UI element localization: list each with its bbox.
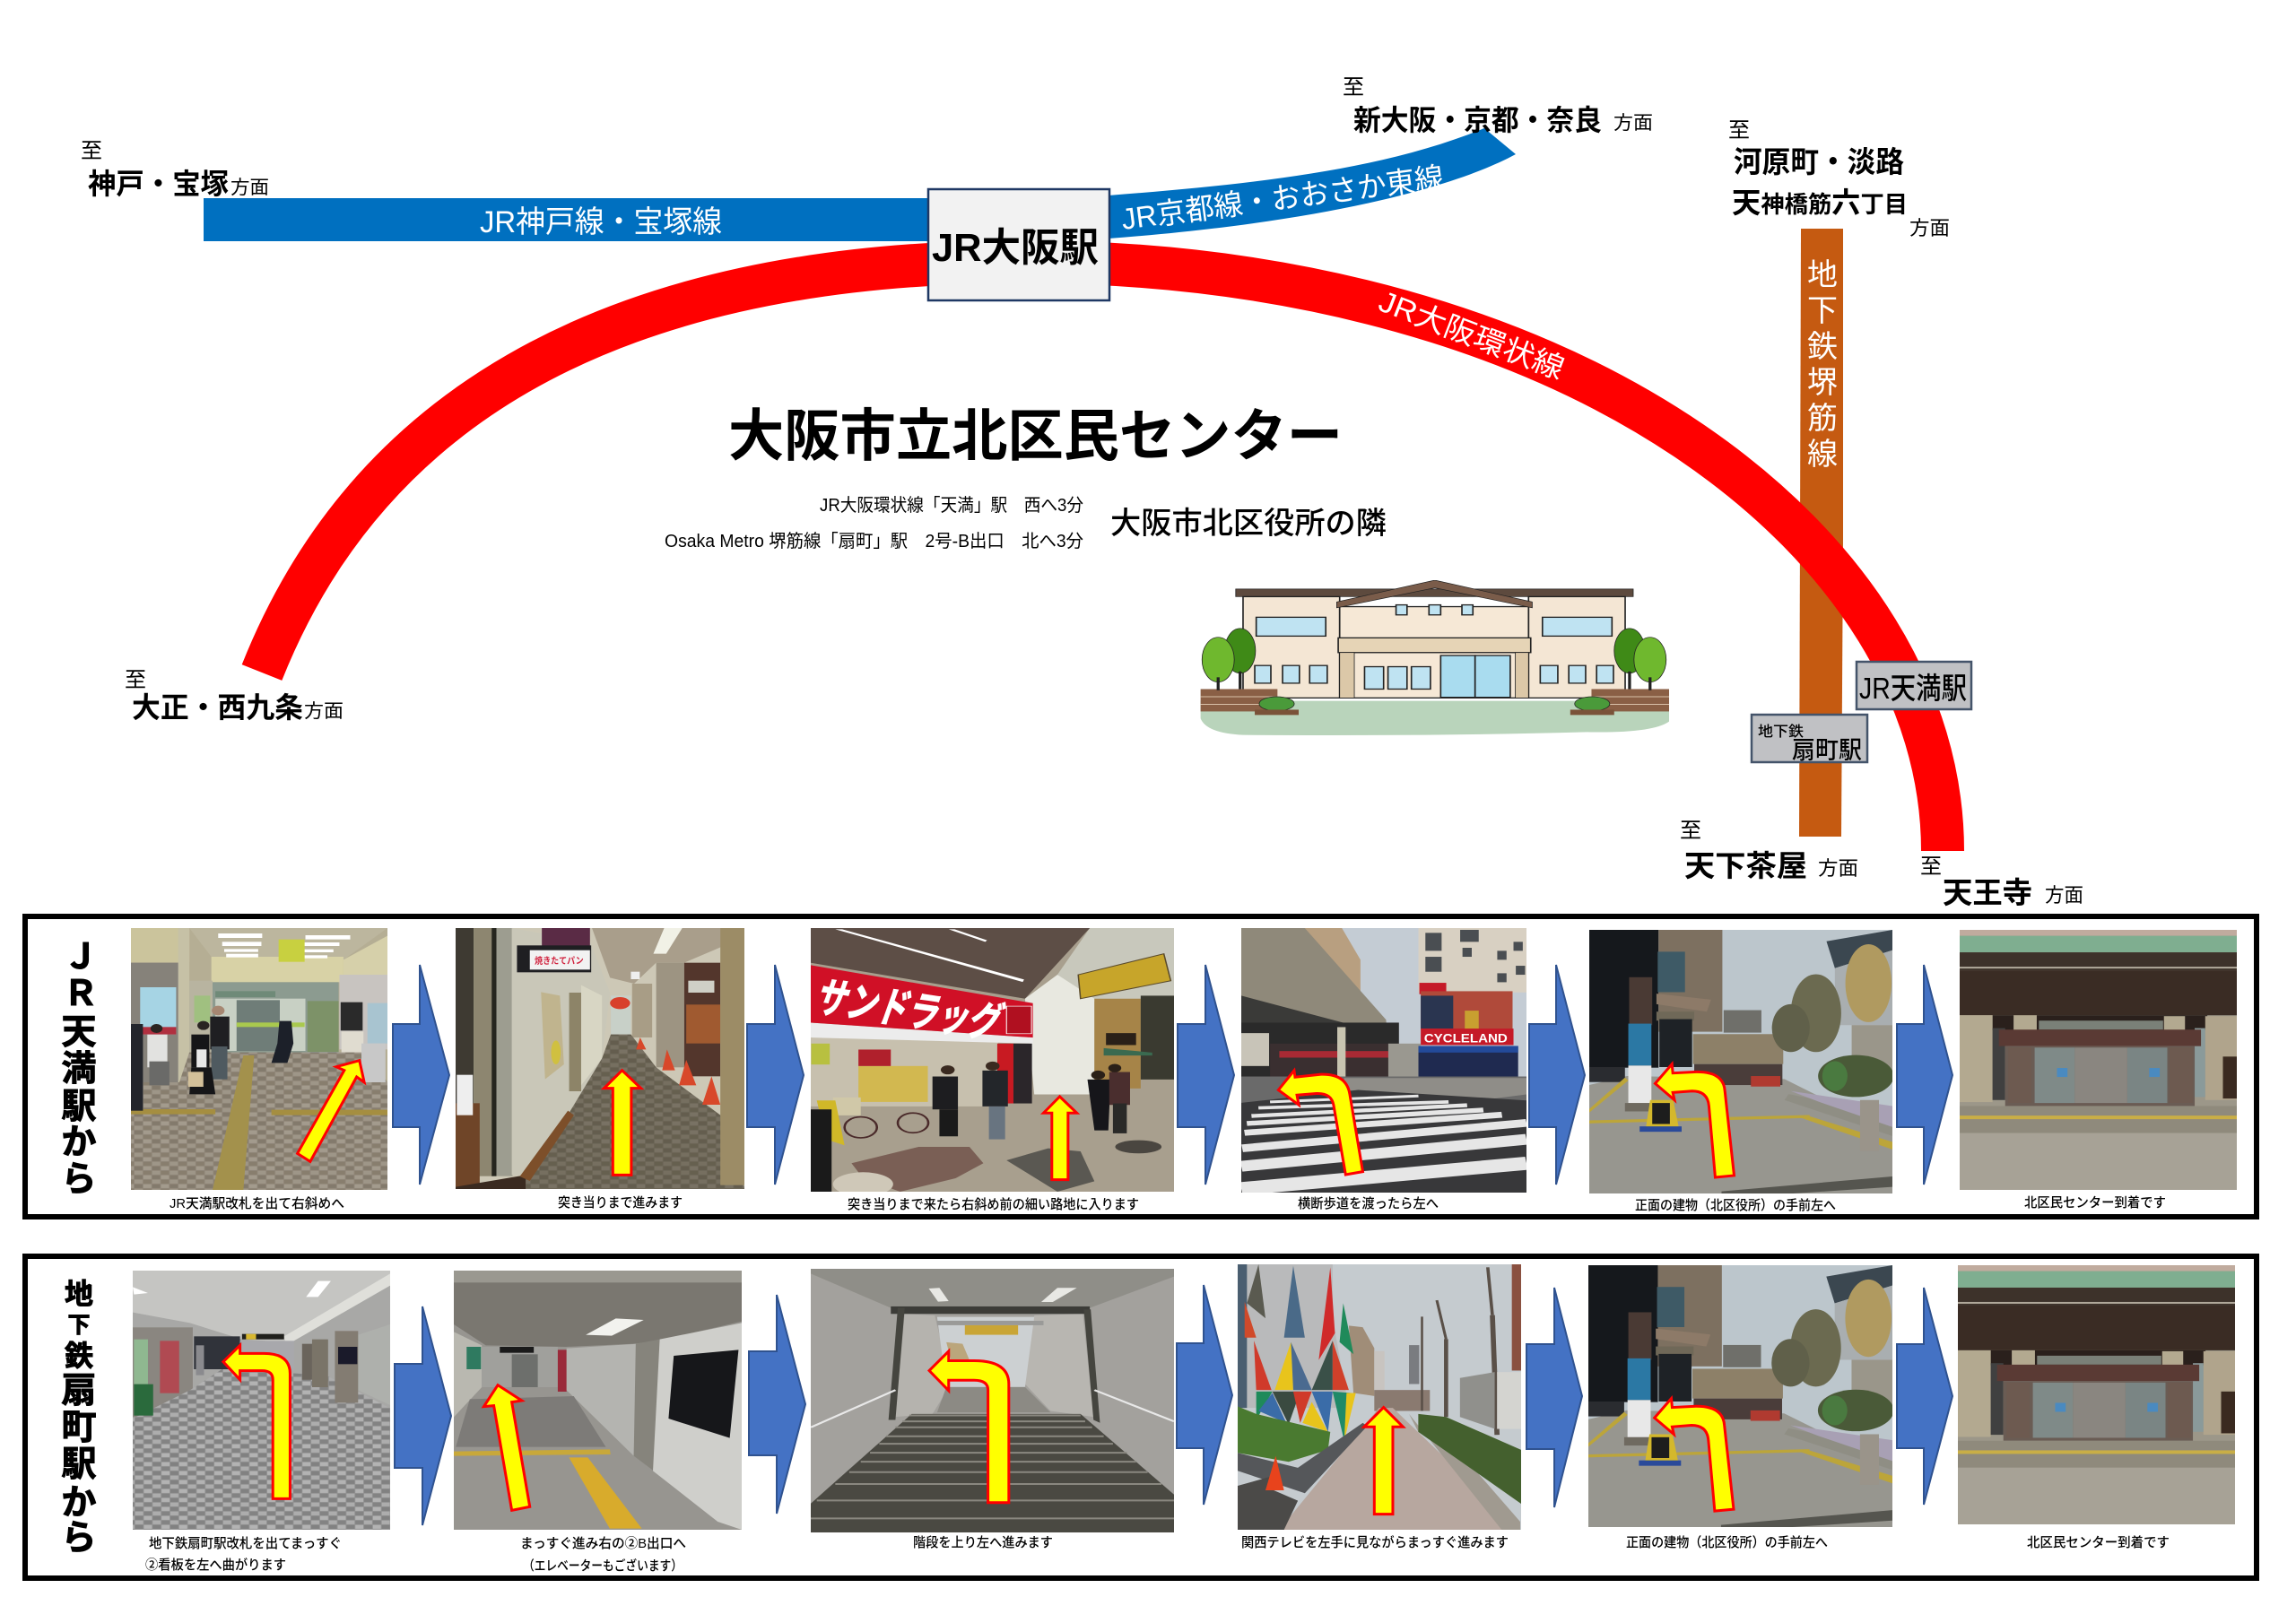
flow arrow 4 xyxy=(1526,1288,1582,1507)
direction: Tengachaya: 至 xyxy=(1680,819,1701,843)
station: JR Osaka: JR大阪駅 xyxy=(932,226,1099,270)
caption 2 xyxy=(520,1536,686,1574)
line: JR Kyoto / Osaka Higashi xyxy=(1109,128,1516,239)
direction: Tengachaya: 方面 xyxy=(1818,857,1858,880)
direction: Taisho Nishikujo: 方面 xyxy=(304,701,344,722)
caption 4: 横断歩道を渡ったら左へ xyxy=(1298,1196,1439,1211)
caption 1: 地下鉄扇町駅改札を出てまっすぐ xyxy=(149,1536,342,1551)
direction: Shin-Osaka Kyoto Nara xyxy=(1343,75,1653,136)
photo 5: ward office front xyxy=(1588,1265,1892,1527)
line: subway Sakaisuji: 筋 xyxy=(1807,402,1838,436)
panel heading: subway Ogimachi: 駅 xyxy=(61,1445,97,1484)
route map xyxy=(204,128,1971,851)
direction: Tennoji: 至 xyxy=(1920,855,1942,879)
line: JR Kobe / Takarazuka xyxy=(204,198,930,241)
panel heading: subway Ogimachi: 扇 xyxy=(61,1372,97,1410)
caption 6: 北区民センター到着です xyxy=(2024,1195,2166,1211)
sign: bakery: 焼きたてパン xyxy=(535,956,584,967)
panel heading: subway Ogimachi xyxy=(61,1278,97,1558)
direction: Shin-Osaka Kyoto Nara: 至 xyxy=(1343,75,1364,100)
caption 1: ②看板を左へ曲がります xyxy=(145,1557,286,1573)
panel heading: JR Temma: 駅 xyxy=(61,1088,97,1126)
arrow: turn left xyxy=(1655,1064,1735,1177)
direction: Tennoji xyxy=(1920,855,2083,909)
panel heading: JR Temma: 天 xyxy=(61,1013,97,1052)
panel heading: JR Temma xyxy=(61,938,99,1199)
line: JR Osaka Loop: JR大阪環状線 xyxy=(1374,284,1569,386)
station: JR Osaka xyxy=(928,189,1109,300)
direction: Shin-Osaka Kyoto Nara: 方面 xyxy=(1613,113,1653,134)
panel heading: subway Ogimachi: 下 xyxy=(67,1313,91,1338)
line: JR Kobe / Takarazuka: JR神戸線・宝塚線 xyxy=(480,205,722,239)
flow arrow 5 xyxy=(1897,965,1952,1185)
line: subway Sakaisuji xyxy=(1799,229,1843,837)
next to ward office: 大阪市北区役所の隣 xyxy=(1110,507,1387,541)
photo 3: shopping arcade with drugstore xyxy=(810,928,1174,1192)
panel heading: JR Temma: ら xyxy=(61,1160,97,1199)
direction: Tengachaya: 天下茶屋 xyxy=(1684,849,1807,882)
station: subway Ogimachi: 地下鉄 xyxy=(1758,724,1804,740)
flow arrow 5 xyxy=(1897,1288,1952,1505)
arrow: turn left xyxy=(1655,1399,1734,1511)
direction: Kawaramachi Awaji Tenjinbashisuji xyxy=(1728,118,1950,239)
caption 4: 関西テレビを左手に見ながらまっすぐ進みます xyxy=(1241,1534,1509,1550)
arrow: straight xyxy=(1044,1097,1077,1180)
panel heading: subway Ogimachi: 地 xyxy=(65,1278,93,1310)
photo 6: Kita civic centre entrance xyxy=(1958,1265,2235,1524)
caption 3: 階段を上り左へ進みます xyxy=(913,1535,1053,1550)
panel heading: JR Temma: か xyxy=(61,1124,97,1162)
photo 5: ward office front xyxy=(1589,930,1892,1193)
photo 2: passage to exit 2-B xyxy=(454,1271,742,1530)
arrow: turn left xyxy=(929,1351,1009,1503)
photo 2: narrow corridor xyxy=(456,928,744,1189)
direction: Kawaramachi Awaji Tenjinbashisuji: 方面 xyxy=(1909,217,1950,239)
direction: Kobe Takarazuka: 神戸・宝塚 xyxy=(88,168,229,200)
flow arrow 2 xyxy=(747,965,804,1185)
direction: Taisho Nishikujo: 至 xyxy=(125,668,146,692)
direction: Kobe Takarazuka: 方面 xyxy=(230,178,269,198)
arrow: turn left xyxy=(1278,1071,1362,1175)
access info xyxy=(665,495,1083,551)
caption 5: 正面の建物（北区役所）の手前左へ xyxy=(1626,1535,1828,1550)
direction: Kawaramachi Awaji Tenjinbashisuji: 天神橋筋六丁目 xyxy=(1732,187,1908,219)
caption 2: まっすぐ進み右の②B出口へ xyxy=(520,1536,686,1551)
panel: route from JR Temma station xyxy=(25,916,2257,1217)
panel heading: subway Ogimachi: ら xyxy=(61,1519,97,1558)
panel: route from subway Ogimachi station xyxy=(25,1256,2257,1578)
caption 2: 突き当りまで進みます xyxy=(558,1195,683,1211)
line: JR Kyoto / Osaka Higashi: JR京都線・おおさか東線 xyxy=(1119,161,1446,236)
panel heading: JR Temma: 満 xyxy=(61,1050,97,1089)
flow arrow 2 xyxy=(749,1295,805,1514)
station: subway Ogimachi xyxy=(1752,715,1867,764)
direction: Tengachaya xyxy=(1680,819,1858,882)
flow arrow 3 xyxy=(1177,1285,1232,1505)
line: subway Sakaisuji: 堺 xyxy=(1807,366,1838,400)
photo 1: subway concourse xyxy=(133,1271,390,1530)
direction: Tennoji: 方面 xyxy=(2045,884,2083,907)
flow arrow 4 xyxy=(1529,965,1585,1185)
panel heading: subway Ogimachi: か xyxy=(61,1484,97,1523)
flow arrow 3 xyxy=(1178,965,1234,1185)
line: subway Sakaisuji: 下 xyxy=(1807,294,1838,328)
arrow: straight xyxy=(604,1071,641,1175)
line: subway Sakaisuji: 地 xyxy=(1807,258,1838,292)
station: JR Temma: JR天満駅 xyxy=(1859,672,1967,705)
station: subway Ogimachi: 扇町駅 xyxy=(1792,737,1862,764)
line: subway Sakaisuji: 鉄 xyxy=(1807,330,1838,364)
direction: Taisho Nishikujo xyxy=(125,668,344,724)
caption 1 xyxy=(145,1536,342,1573)
arrow: diagonal right xyxy=(298,1061,364,1161)
access info: Osaka Metro 堺筋線「扇町」駅 2号-B出口 北へ3分 xyxy=(665,531,1083,551)
icon: community centre building xyxy=(1200,580,1669,735)
access info: JR大阪環状線「天満」駅 西へ3分 xyxy=(820,495,1083,516)
line: subway Sakaisuji: 線 xyxy=(1807,438,1838,472)
title: 大阪市立北区民センター xyxy=(728,405,1343,468)
arrow: turn left xyxy=(223,1345,290,1498)
arrow: straight ahead xyxy=(483,1385,530,1510)
photo 4: sidewalk with colourful sculpture xyxy=(1238,1264,1521,1530)
direction: Kawaramachi Awaji Tenjinbashisuji: 至 xyxy=(1728,118,1750,143)
caption 6: 北区民センター到着です xyxy=(2027,1535,2170,1550)
panel heading: subway Ogimachi: 鉄 xyxy=(65,1340,93,1372)
sign: Sun Drug xyxy=(810,965,1033,1046)
station: JR Temma xyxy=(1857,662,1971,709)
direction: Kobe Takarazuka xyxy=(81,139,269,200)
direction: Tennoji: 天王寺 xyxy=(1943,876,2032,909)
line: JR Osaka Loop xyxy=(262,262,1943,851)
flow arrow 1 xyxy=(395,1306,451,1525)
caption 3: 突き当りまで来たら右斜め前の細い路地に入ります xyxy=(848,1197,1139,1212)
caption 5: 正面の建物（北区役所）の手前左へ xyxy=(1635,1198,1836,1213)
photo 4: crossing xyxy=(1241,928,1526,1193)
direction: Shin-Osaka Kyoto Nara: 新大阪・京都・奈良 xyxy=(1353,104,1602,136)
direction: Kobe Takarazuka: 至 xyxy=(81,139,102,163)
panel heading: JR Temma: Ｒ xyxy=(63,975,99,1013)
direction: Taisho Nishikujo: 大正・西九条 xyxy=(132,691,303,724)
caption 2: （エレベーターもございます） xyxy=(523,1558,683,1574)
photo 3: stairs xyxy=(811,1269,1174,1532)
arrow: straight xyxy=(1364,1408,1403,1515)
caption 1: JR天満駅改札を出て右斜めへ xyxy=(170,1196,344,1211)
photo 1: JR Temma gates xyxy=(131,928,387,1190)
panel heading: JR Temma: Ｊ xyxy=(63,938,99,976)
direction: Kawaramachi Awaji Tenjinbashisuji: 河原町・淡路 xyxy=(1734,145,1904,178)
flow arrow 1 xyxy=(393,965,449,1185)
photo 6: Kita civic centre entrance xyxy=(1960,930,2237,1190)
panel heading: subway Ogimachi: 町 xyxy=(61,1409,97,1447)
